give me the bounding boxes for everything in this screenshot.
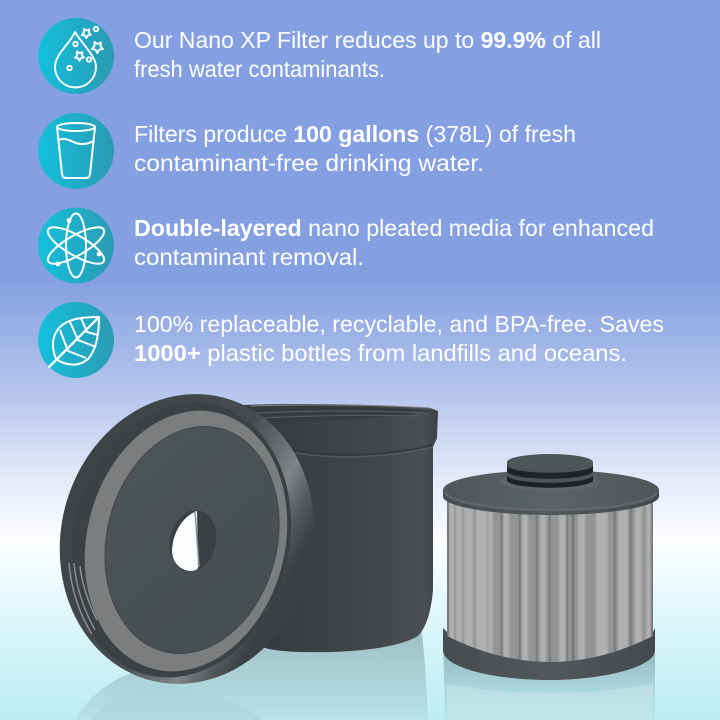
lid inner disk <box>82 408 302 672</box>
icon: water drop <box>38 18 114 94</box>
feature row 4 <box>38 302 664 378</box>
threaded neck <box>507 454 593 488</box>
text: contaminants reduction: Our Nano XP Filter reduces up to 99.9% of all <box>134 27 601 53</box>
bottom ring <box>443 628 655 680</box>
text: nano pleated media: Double-layered nano pleated media for enhanced <box>134 215 654 241</box>
product: pleated filter cartridge <box>443 454 659 680</box>
reflection of filter <box>443 640 655 720</box>
icon: drinking glass <box>38 113 114 189</box>
lid grey sealing ring <box>58 389 314 693</box>
lid outer wall <box>29 367 345 711</box>
text: contaminants reduction: fresh water contaminants. <box>134 56 385 82</box>
text: filter capacity: contaminant-free drinking water. <box>134 150 484 176</box>
feature row 3 <box>38 208 654 284</box>
product: filter cup <box>240 404 438 652</box>
text: replaceable and recyclable: 1000+ plastic bottles from landfills and oceans. <box>134 340 627 366</box>
text: filter capacity <box>134 121 576 176</box>
feature row 2 <box>38 113 576 189</box>
text: contaminants reduction <box>134 27 601 82</box>
pleated media <box>447 502 653 662</box>
feature row 1 <box>38 18 601 94</box>
center hole <box>164 506 222 576</box>
text: nano pleated media: contaminant removal. <box>134 244 364 270</box>
product: lid seen from inside <box>29 367 345 711</box>
text: nano pleated media <box>134 215 654 270</box>
reflection of cup and lid <box>75 625 428 720</box>
icon: atom <box>38 208 114 284</box>
text: replaceable and recyclable: 100% replaceable, recyclable, and BPA-free. Saves <box>134 311 664 337</box>
lid thread highlights <box>69 563 97 634</box>
text: replaceable and recyclable <box>134 311 664 366</box>
top cap <box>443 470 659 515</box>
lid inner cavity <box>43 379 319 701</box>
text: filter capacity: Filters produce 100 gallons (378L) of fresh <box>134 121 576 147</box>
icon: leaf <box>38 302 114 378</box>
